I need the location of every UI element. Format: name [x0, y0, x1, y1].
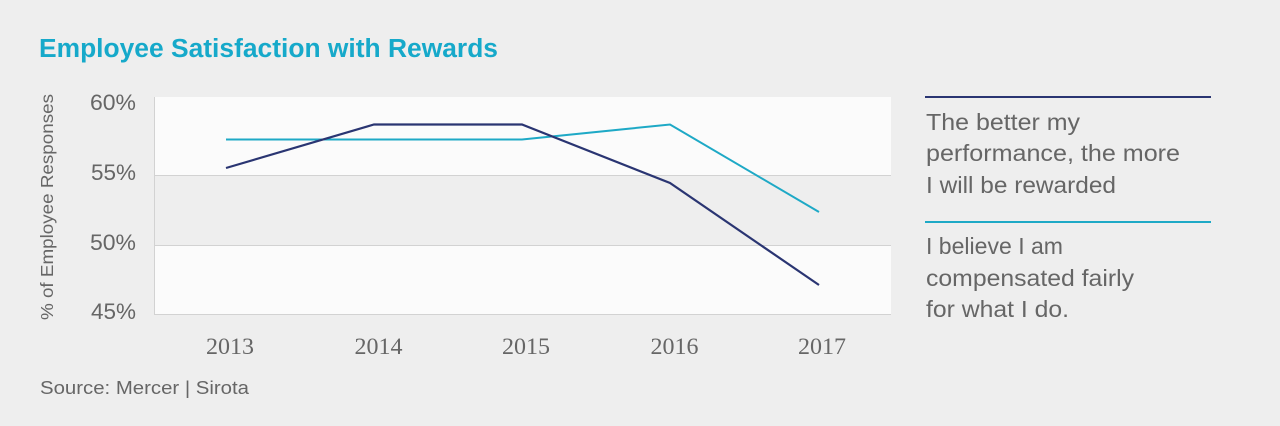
legend item: compensation — [925, 221, 1211, 322]
x-axis labels: 2014 — [354, 334, 403, 359]
series: the better my performance — [226, 124, 819, 285]
source note: Source: Mercer | Sirota — [40, 378, 250, 398]
legend item: compensation: for what I do. — [926, 296, 1069, 322]
y-axis labels: 55% — [91, 160, 136, 185]
legend item: compensation: I believe I am — [926, 233, 1063, 259]
y-axis labels: 45% — [91, 299, 136, 324]
plot bands — [154, 97, 891, 314]
legend item: performance — [925, 96, 1211, 198]
y-axis title: % of Employee Responses — [37, 94, 57, 320]
legend — [925, 96, 1211, 322]
legend item: performance: The better my — [926, 109, 1081, 135]
title: Employee Satisfaction with Rewards — [39, 35, 498, 63]
legend item: performance: performance, the more — [926, 140, 1180, 166]
x-axis labels: 2015 — [502, 334, 550, 359]
x-axis labels — [206, 334, 846, 359]
legend item: performance: I will be rewarded — [926, 172, 1116, 198]
y-axis labels: 60% — [90, 90, 136, 115]
x-axis labels: 2017 — [798, 334, 846, 359]
x-axis labels: 2013 — [206, 334, 254, 359]
y-axis labels: 50% — [90, 230, 136, 255]
line chart — [154, 97, 891, 314]
x-axis labels: 2016 — [650, 334, 698, 359]
y-axis labels — [90, 90, 136, 324]
legend item: compensation: compensated fairly — [926, 265, 1135, 291]
series: I believe I am compensated fairly — [226, 124, 819, 212]
